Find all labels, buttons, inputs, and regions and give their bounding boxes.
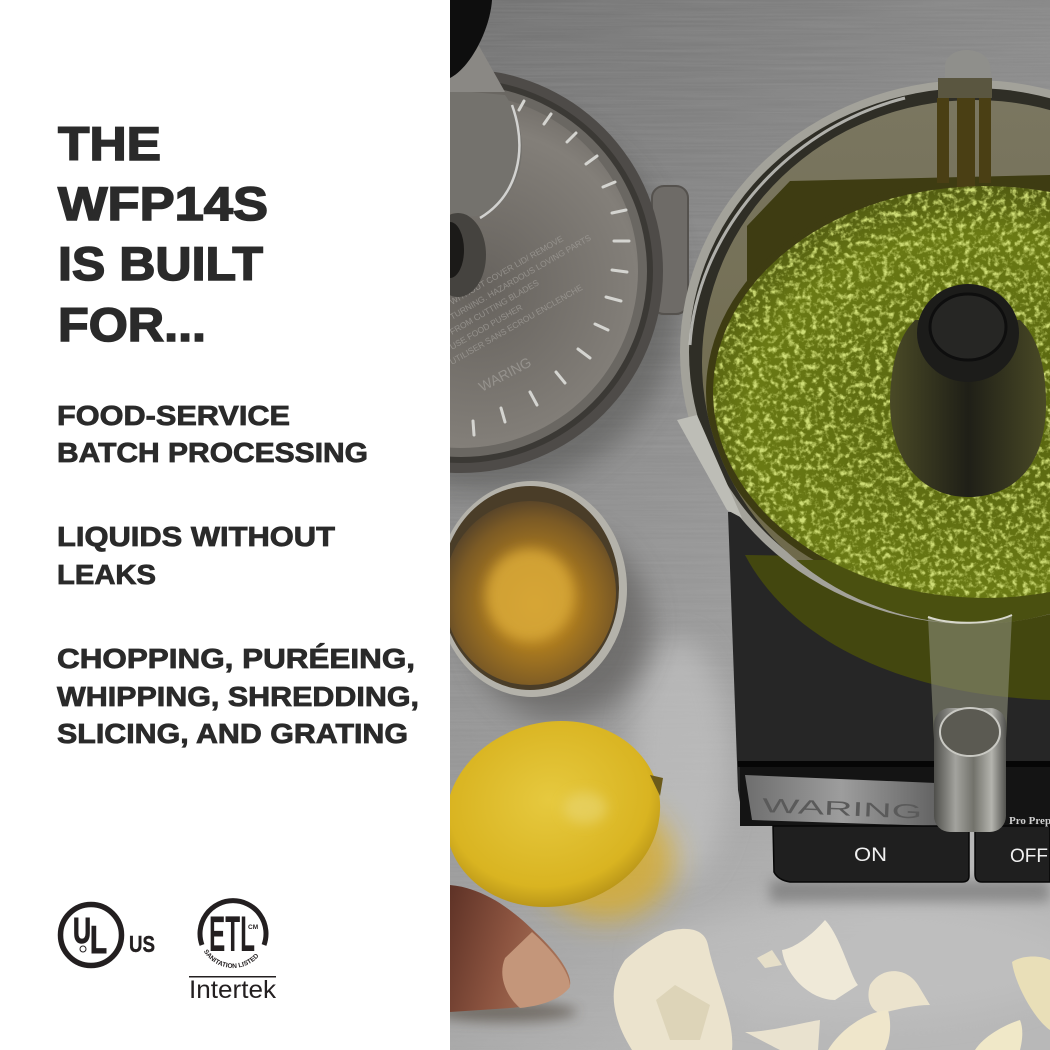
pesto (710, 180, 1050, 600)
on button (773, 826, 969, 882)
product photo (450, 0, 1050, 1050)
stainless steel counter (450, 0, 1050, 1050)
use case: food preparation functions: WHIPPING, SHREDDING, (57, 681, 419, 712)
waring nameplate (745, 775, 938, 826)
bowl lock handle (945, 50, 992, 80)
icon: ETL Intertek certification: SANITATION LISTED (204, 950, 258, 968)
headline (58, 117, 268, 351)
icon: ETL Intertek certification: Intertek (189, 976, 277, 1004)
use case: food preparation functions: SLICING, AND GRATING (57, 718, 408, 749)
bowl rim tab (677, 415, 742, 518)
icon: UL US certification: US (129, 931, 155, 957)
lid tick marks (473, 101, 629, 435)
lid embossed text: USE FOOD PUSHER (448, 302, 524, 352)
food processor base (728, 512, 1050, 902)
use case: batch processing (57, 400, 368, 468)
use case: food preparation functions: CHOPPING, PURÉEING, (57, 643, 415, 674)
food processor bowl (677, 50, 1050, 640)
center post (890, 284, 1046, 497)
lid embossed text: UTILISER SANS ECROU ENCLENCHE (448, 282, 585, 367)
lid embossed text: WARING (476, 354, 534, 395)
lid embossed text: WITHOUT COVER LID/ REMOVE (448, 233, 565, 307)
white text panel (0, 0, 450, 1050)
lid embossed text: FROM CUTTING BLADES (448, 277, 541, 337)
icon: UL US certification (60, 904, 155, 966)
use case: liquids (57, 521, 335, 590)
food processor lid (450, 72, 689, 500)
use case: liquids: LIQUIDS WITHOUT (57, 521, 335, 552)
waring nameplate: WARING (762, 795, 923, 824)
off button (975, 826, 1050, 882)
shallot (433, 885, 577, 1022)
lid embossed text (448, 232, 593, 395)
icon: ETL Intertek certification: CM (248, 924, 258, 931)
lid embossed text: TURNING. HAZARDOUS LOVING PARTS (448, 232, 593, 322)
use case: batch processing: FOOD-SERVICE (57, 400, 290, 431)
use case: batch processing: BATCH PROCESSING (57, 437, 368, 468)
headline: FOR... (58, 298, 206, 351)
oil bowl (437, 481, 650, 720)
use case: food preparation functions (57, 643, 419, 749)
headline: WFP14S (58, 177, 268, 230)
icon: ETL Intertek certification: ETL (209, 906, 255, 962)
lemon (426, 699, 680, 929)
headline: THE (58, 117, 161, 170)
icon: UL US certification: U (73, 910, 91, 951)
bowl lower wall below the rim (745, 555, 1050, 700)
pro label: Pro Prep (1009, 815, 1050, 827)
icon: ETL Intertek certification (189, 898, 277, 1004)
icon: UL US certification: L (90, 919, 107, 962)
garlic peels and cloves (614, 920, 1050, 1050)
pusher stem resting on lid (450, 0, 522, 297)
off button: OFF (1010, 846, 1048, 867)
transparent bowl handle (928, 615, 1012, 832)
on button: ON (854, 845, 887, 866)
headline: IS BUILT (58, 237, 263, 290)
use case: liquids: LEAKS (57, 559, 156, 590)
